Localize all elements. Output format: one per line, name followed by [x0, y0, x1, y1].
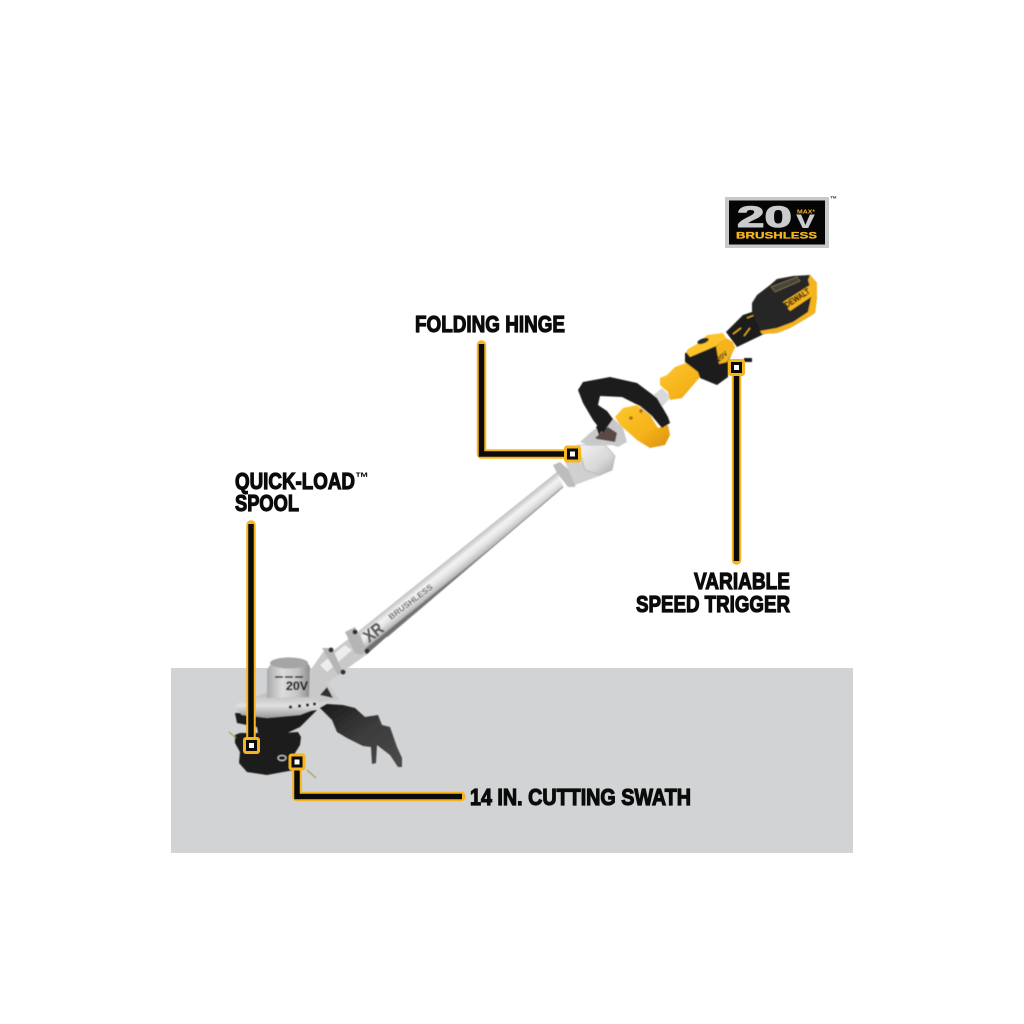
- trimmer: hinge assembly: [553, 414, 627, 487]
- label: 14 IN. CUTTING SWATH: [470, 784, 691, 810]
- label: VARIABLE: [694, 568, 790, 594]
- callout: folding hinge: [415, 311, 580, 461]
- callout: variable speed trigger: SPEED TRIGGER: [636, 591, 790, 617]
- trimmer: rear handle: [726, 310, 764, 347]
- trimmer: trigger housing: [685, 333, 735, 385]
- badge: 20V MAX brushless: BRUSHLESS: [736, 230, 817, 240]
- deck plate: [235, 693, 318, 718]
- callout: variable speed trigger: [636, 360, 790, 617]
- badge: 20V MAX brushless: ™: [830, 196, 837, 203]
- leader line: [482, 345, 572, 454]
- leader line: [246, 525, 256, 745]
- upper black housing: [235, 710, 317, 735]
- callout: quick-load spool: [235, 468, 369, 752]
- motor dome: [267, 657, 310, 698]
- head vents: [275, 676, 303, 678]
- trimmer: yellow forward grip: [660, 362, 710, 400]
- trimmer: main shaft: [360, 472, 563, 655]
- trimmer: [229, 275, 817, 778]
- cutting line right: [307, 770, 316, 778]
- callout: quick-load spool: ™: [355, 469, 369, 485]
- DEWALT label: DEWALT: [783, 286, 812, 310]
- label: QUICK-LOAD: [235, 468, 355, 494]
- callout: quick-load spool: SPOOL: [235, 490, 299, 516]
- callout: 14 in cutting swath: [290, 755, 691, 810]
- leader line: [297, 762, 461, 796]
- shaft branding: XR: XR: [360, 619, 387, 646]
- spool: [235, 732, 301, 775]
- head branding: 20V: 20V: [286, 679, 308, 693]
- trimmer: battery pack: [752, 275, 817, 334]
- panel: gray ground band: [171, 668, 853, 853]
- trimmer: trigger: [744, 358, 752, 362]
- trimmer: yellow guard housing: [615, 405, 670, 448]
- badge: 20V MAX brushless: MAX*: [797, 210, 816, 216]
- trimmer: lower clamps and neck: [305, 627, 370, 702]
- badge: 20V MAX brushless: 20: [737, 201, 792, 234]
- guard: [320, 704, 402, 767]
- trimmer: black loop handle: [578, 377, 670, 433]
- badge: 20V MAX brushless: v: [796, 204, 816, 234]
- label: FOLDING HINGE: [415, 311, 565, 337]
- cutting line left: [229, 732, 236, 738]
- trimmer: upper shaft: [638, 388, 671, 420]
- deck vents: [289, 704, 316, 707]
- shaft branding: BRUSHLESS: BRUSHLESS: [387, 582, 435, 622]
- trimmer: cutting head: [229, 657, 402, 778]
- leader line: [732, 367, 741, 560]
- trimmer: trigger housing: 20V: [716, 350, 730, 364]
- badge: 20V MAX brushless: [725, 196, 837, 248]
